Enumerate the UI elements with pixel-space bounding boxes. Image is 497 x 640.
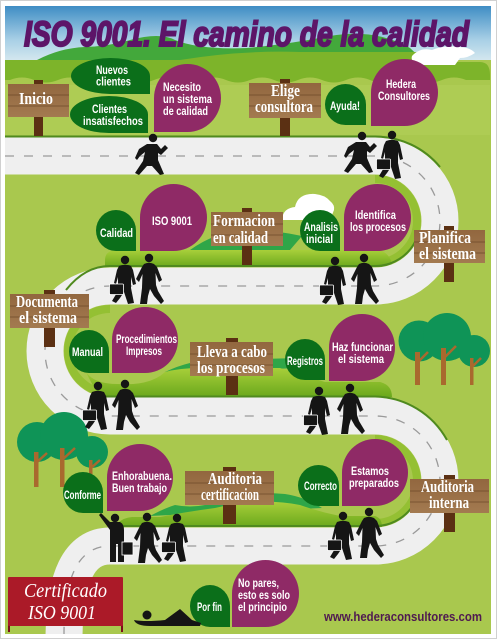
sign: Planifica el sistema: el sistema xyxy=(419,244,476,263)
bubble: No pares xyxy=(232,560,299,627)
road xyxy=(0,136,447,640)
bubble: Haz funcionar el sistema: el sistema xyxy=(338,354,384,366)
bubble: Clientes insatisfechos xyxy=(70,96,148,133)
bubble: No pares: el principio xyxy=(238,602,287,614)
figure: man lying down xyxy=(134,609,201,626)
sign: Documenta el sistema: el sistema xyxy=(19,308,77,327)
hedge band with scalloped edge xyxy=(5,52,490,82)
sign: Elige consultora xyxy=(249,79,321,136)
bubble: Haz funcionar el sistema xyxy=(329,314,395,381)
trees: left group xyxy=(17,412,108,487)
bubble: Calidad xyxy=(96,210,136,251)
sign: Lleva a cabo los procesos: los procesos xyxy=(197,358,265,377)
bubble: Hedera Consultores xyxy=(371,59,438,126)
road edges xyxy=(5,136,447,526)
sign: Planifica el sistema xyxy=(414,226,485,282)
bubble: Necesito un sistema de calidad xyxy=(154,64,221,132)
bubble: Procedimientos Impresos: Procedimientos xyxy=(116,334,177,346)
certificate banner: ISO 9001 xyxy=(27,602,96,624)
lawn ring inside first bend xyxy=(375,179,417,263)
bubble: Registros: Registros xyxy=(287,356,323,368)
bubble: No pares: esto es solo xyxy=(238,590,290,602)
bubble: Registros xyxy=(285,339,325,380)
bubble: Correcto: Correcto xyxy=(304,481,337,493)
small hill: row two xyxy=(190,232,302,250)
bubble: Ayuda xyxy=(325,84,366,125)
hedge strip: row three xyxy=(85,368,392,397)
certificate banner: Certificado xyxy=(24,580,107,602)
small hill: row three xyxy=(165,358,300,372)
bubble: Nuevos clientes: Nuevos xyxy=(96,65,128,77)
figure: man with case 7 xyxy=(328,512,354,560)
figure: man with case 2 xyxy=(110,256,136,304)
bubble: Identifica los procesos xyxy=(344,184,411,251)
sign: Formacion en calidad: en calidad xyxy=(213,228,268,247)
sign: Inicio: Inicio xyxy=(19,89,53,108)
bubble: Estamos preparados xyxy=(342,439,408,506)
bubble: Correcto xyxy=(298,465,339,506)
hedge strip: row two xyxy=(105,250,392,267)
bubble: Clientes insatisfechos: Clientes xyxy=(92,104,127,116)
figure: man with case 1 xyxy=(376,131,403,179)
figure: runner 1 xyxy=(135,134,168,175)
distant hills xyxy=(37,34,425,62)
cloud: top right xyxy=(412,46,475,65)
bubble: Procedimientos Impresos: Impresos xyxy=(126,346,162,358)
bubble: Por fin xyxy=(190,585,230,627)
sign: Auditoria interna: Auditoria xyxy=(421,477,474,496)
bubble: Enhorabuena: Buen trabajo xyxy=(112,483,167,495)
bubble: Enhorabuena xyxy=(107,444,173,511)
figure: man with case 4 xyxy=(82,382,109,430)
bubble: Necesito un sistema de calidad: un sistema xyxy=(163,94,212,106)
bubble: ISO 9001 xyxy=(140,184,207,251)
sign: Lleva a cabo los procesos xyxy=(190,338,273,395)
sign: Auditoria certificacion: Auditoria xyxy=(208,469,262,488)
bubble: Hedera Consultores: Consultores xyxy=(378,91,430,103)
bubble: Necesito un sistema de calidad: de calidad xyxy=(163,106,208,118)
bubble: Conforme: Conforme xyxy=(64,490,101,502)
sign: Formacion en calidad: Formacion xyxy=(213,211,275,230)
sign: Formacion en calidad xyxy=(211,208,283,265)
bubble: Enhorabuena: Enhorabuena. xyxy=(112,471,172,483)
bubble: Conforme xyxy=(63,472,103,513)
bubble: Analisis inicial xyxy=(300,210,340,251)
small hill: row four xyxy=(150,493,322,516)
bubble: Calidad: Calidad xyxy=(100,228,133,240)
bubble: No pares: No pares, xyxy=(238,578,279,590)
bubble: Manual xyxy=(69,330,109,373)
bubble: Clientes insatisfechos: insatisfechos xyxy=(83,116,143,128)
lawn ring inside third bend xyxy=(375,439,417,523)
sky xyxy=(5,6,491,60)
figure: walker 3 xyxy=(351,254,379,304)
bubble: ISO 9001: ISO 9001 xyxy=(152,216,192,228)
bubble: Analisis inicial: Analisis xyxy=(304,222,338,234)
light grass under hedge xyxy=(5,85,490,135)
sign: Auditoria interna xyxy=(410,475,489,532)
figure: walker 4 xyxy=(112,380,140,430)
cloud: middle xyxy=(282,194,334,220)
bubble: Procedimientos Impresos xyxy=(112,307,178,373)
figure: walker 5 xyxy=(337,384,365,434)
bubble: Haz funcionar el sistema: Haz funcionar xyxy=(332,342,393,354)
bubble: Identifica los procesos: los procesos xyxy=(350,222,406,234)
sign: Auditoria certificacion: certificacion xyxy=(201,485,259,504)
figure: man with case 6 xyxy=(162,514,188,562)
figure: man with case 3 xyxy=(320,257,346,305)
sign: Inicio xyxy=(8,80,69,136)
figure: man waving with suitcase xyxy=(99,513,133,562)
bubble: Nuevos clientes xyxy=(71,58,150,94)
figure: man with case 5 xyxy=(304,387,330,435)
bubble: Necesito un sistema de calidad: Necesito xyxy=(163,82,201,94)
bubble: Por fin: Por fin xyxy=(197,602,222,614)
sign: Lleva a cabo los procesos: Lleva a cabo xyxy=(197,342,267,361)
sign: Documenta el sistema: Documenta xyxy=(16,292,78,311)
sign: Elige consultora: consultora xyxy=(255,97,313,116)
lawn ring inside left bend xyxy=(68,309,110,393)
bubble: Manual: Manual xyxy=(72,347,103,359)
hedge strip: row four xyxy=(115,502,382,527)
bubble: Estamos preparados: Estamos xyxy=(351,466,389,478)
figure: runner 2 xyxy=(344,132,377,173)
bubble: Analisis inicial: inicial xyxy=(306,234,333,246)
bubble: Identifica los procesos: Identifica xyxy=(355,210,396,222)
figure: walker 2 xyxy=(136,254,164,304)
sign: Planifica el sistema: Planifica xyxy=(419,228,471,247)
road centre line xyxy=(5,156,440,634)
trees: right group xyxy=(398,313,490,385)
sign: Auditoria certificacion xyxy=(185,467,274,524)
sign: Elige consultora: Elige xyxy=(271,81,300,100)
bubble: Ayuda: Ayuda! xyxy=(330,101,360,113)
sign: Auditoria interna: interna xyxy=(429,493,469,512)
website link: www.hederaconsultores.com xyxy=(323,610,482,624)
sign: Documenta el sistema xyxy=(10,290,89,347)
certificate banner xyxy=(8,577,123,632)
figure: walker 6 xyxy=(134,513,162,563)
figure: walker 7 xyxy=(356,508,384,558)
bubble: Nuevos clientes: clientes xyxy=(96,76,131,88)
bubble: Hedera Consultores: Hedera xyxy=(386,79,416,91)
bubble: Estamos preparados: preparados xyxy=(349,478,399,490)
